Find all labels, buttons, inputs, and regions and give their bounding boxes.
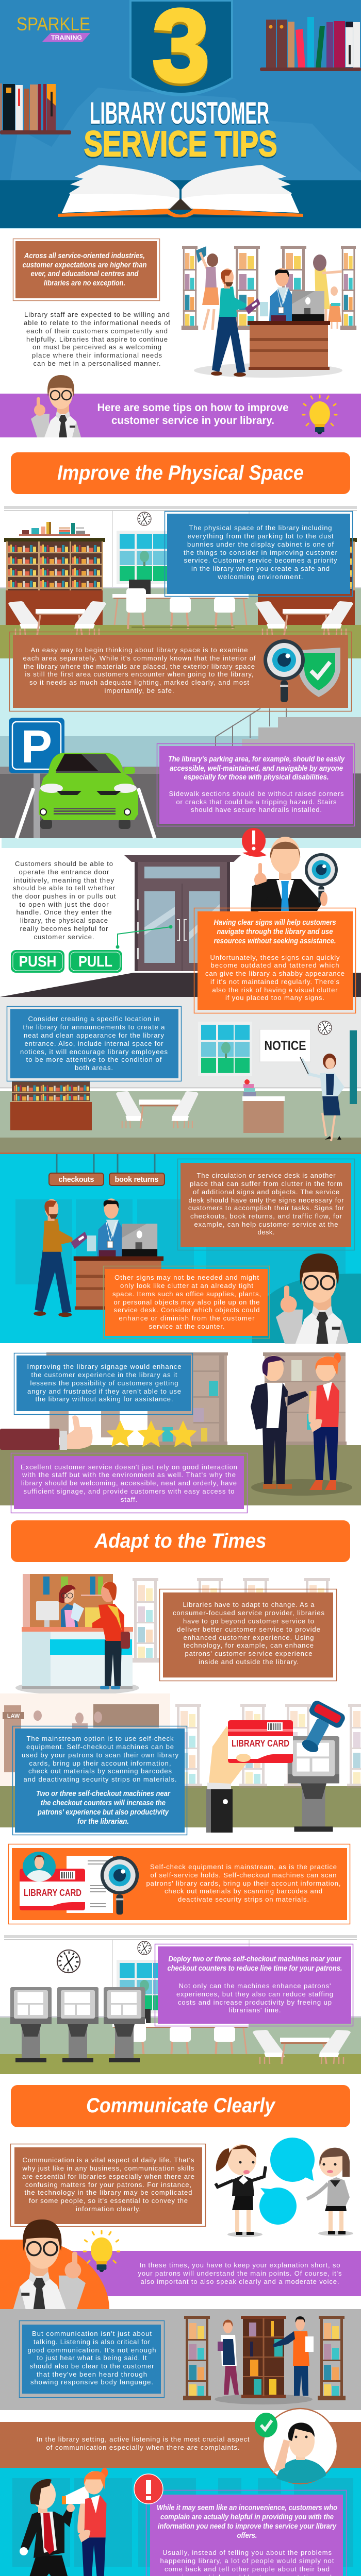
panel: excellent service: sufficient signage, and provide customers with easy access to bbox=[24, 1487, 234, 1495]
panel: self-check equipment: equipment. Self-checkout machines can be bbox=[26, 1743, 174, 1751]
panel: orange sign advice: if you placed too many signs. bbox=[225, 994, 324, 1002]
panel: orange sign advice: Having clear signs will help customers bbox=[214, 918, 336, 927]
band: keep it short: In these times, you have to keep your explanation short, so bbox=[139, 2261, 340, 2269]
band: active listening: In the library setting, active listening is the most crucial aspect bbox=[36, 2435, 250, 2443]
hanging signs: book returns bbox=[114, 1176, 159, 1184]
panel: excellent service bbox=[11, 1453, 248, 1513]
panel: improve signage bbox=[14, 1353, 193, 1415]
band: active listening: of communication especially when there are complaints. bbox=[46, 2444, 239, 2451]
panel: assess space: importantly, be safe. bbox=[104, 687, 174, 694]
floor wedge at door bbox=[0, 973, 361, 997]
exterior background bbox=[0, 658, 361, 848]
panel: deploy machines: costs and increase productivity by freeing up bbox=[178, 1998, 332, 2006]
heading: Communicate Clearly: Communicate Clearly bbox=[86, 2094, 276, 2117]
thumbs up hand bbox=[0, 1415, 93, 1450]
woman and child on the right bbox=[313, 255, 342, 330]
illustration: check-in counter bbox=[15, 1574, 139, 1695]
panel: announcements: Consider creating a specific location in bbox=[28, 1015, 160, 1023]
icon: library card and documents bbox=[20, 1852, 139, 1914]
icon: parking sign bbox=[9, 718, 64, 838]
text block: library staff bbox=[24, 311, 170, 367]
panel: self-check equipment: used by your patrons to scan their own library bbox=[22, 1751, 178, 1759]
right woman bbox=[307, 2148, 353, 2236]
panel: adapt to change: have to go beyond customer service to bbox=[183, 1617, 314, 1625]
staff woman bbox=[218, 2319, 239, 2395]
panel: self-service holds: Self-check equipment is mainstream, as is the practice bbox=[150, 1863, 337, 1871]
text block: entrance door: customer service. bbox=[34, 933, 94, 941]
panel: improve signage: the customer experience in the library as it bbox=[31, 1371, 177, 1379]
panel: physical space: everything from the parking lot to the dust bbox=[188, 532, 334, 540]
panel: other signs: service at the counter. bbox=[149, 1323, 225, 1330]
panel: self-check equipment: patrons' experience but also productivity bbox=[37, 1808, 169, 1817]
panel: physical space: the things to consider in improving customer bbox=[184, 549, 338, 556]
notice board: NOTICE bbox=[264, 1039, 306, 1053]
panel: other signs: space. Items such as office supplies, plants, bbox=[112, 1290, 261, 1298]
panel: improve signage: Improving the library signage would enhance bbox=[27, 1363, 182, 1370]
panel: self-check equipment: cards, bring up their account information, bbox=[29, 1759, 171, 1767]
panel: assess space: the library where the materials are placed, the exterior library space bbox=[24, 663, 255, 670]
panel: announcements bbox=[7, 1007, 182, 1081]
hand holding card bbox=[206, 1720, 293, 1833]
illustration: entrance door bbox=[124, 855, 241, 971]
panel: other signs: only look like clutter at an already tight bbox=[120, 1282, 253, 1290]
panel: parking and sidewalks: especially for those with physical disabilities. bbox=[184, 773, 329, 782]
panel: service desk clutter: example, can help customer service at the bbox=[194, 1221, 338, 1228]
icon: library card and documents: LIBRARY CARD bbox=[24, 1887, 81, 1898]
panel: adapt to change: technology, for example, can enhance bbox=[184, 1641, 314, 1649]
panel: physical space: bunnies under the display cabinet is one of bbox=[187, 540, 334, 548]
cyan background for complaints bbox=[0, 2468, 361, 2576]
panel: intro callout: Across all service-oriented industries, bbox=[24, 251, 145, 260]
scene: listening staff bbox=[0, 2309, 361, 2410]
connector line from door handle to signs bbox=[116, 925, 172, 949]
text block: library staff: each of their customers competently and bbox=[26, 327, 168, 335]
panel: excellent service: library should be welcoming, accessible, neat and orderly, have bbox=[21, 1479, 237, 1487]
panel: assess space: An easy way to begin thinking about library space is to examine bbox=[31, 646, 248, 654]
text block: entrance door: really becomes helpful for bbox=[20, 925, 108, 933]
panel: adapt to change: inside and outside the library. bbox=[199, 1658, 299, 1666]
panel: intro callout: customer expectations are higher than bbox=[23, 261, 146, 269]
panel: self-check equipment: for the librarian. bbox=[77, 1817, 129, 1826]
law shelf sign: LAW bbox=[7, 1713, 20, 1719]
panel: service desk clutter: checkouts, book returns, and traffic flow, for bbox=[190, 1212, 342, 1220]
panel: physical space: The physical space of the library including bbox=[189, 524, 332, 532]
panel: self-check equipment: The mainstream option is to use self-check bbox=[27, 1735, 174, 1742]
panel: physical space: service. Customer service becomes a priority bbox=[184, 556, 337, 564]
illustration: man with megaphone and woman bbox=[10, 2468, 141, 2576]
panel: announcements: to be more attentive to the condition of bbox=[26, 1056, 162, 1063]
left woman bbox=[216, 2144, 266, 2237]
panel: adapt to change: patrons' customer service experience bbox=[185, 1650, 313, 1657]
scene: signage and staff bbox=[0, 1352, 361, 1505]
panel: complaints: information you need to improve the service your library bbox=[158, 2522, 337, 2531]
woman reaching for a book bbox=[196, 246, 219, 330]
man and librarian at counter bbox=[211, 268, 330, 377]
title: SERVICE TIPS bbox=[84, 124, 277, 164]
panel: deploy machines: Not only can the machines enhance patrons' bbox=[178, 1982, 331, 1990]
hanging signs bbox=[49, 1154, 165, 1185]
woman bbox=[77, 2468, 108, 2576]
heading: Improve the Physical Space bbox=[11, 452, 350, 494]
hand holding card: LIBRARY CARD bbox=[232, 1738, 289, 1749]
panel: orange sign advice: resources without seeking assistance. bbox=[214, 937, 336, 945]
panel: listening: good communication. It's not enough bbox=[28, 2346, 156, 2354]
text block: library staff: able to relate to the informational needs of bbox=[24, 319, 170, 327]
panel: other signs bbox=[103, 1266, 269, 1338]
text block: library staff: Library staff are expected to be willing and bbox=[24, 311, 170, 318]
text block: library staff: place where their informational needs bbox=[32, 351, 162, 359]
staff man bbox=[273, 2316, 314, 2396]
panel: physical space: in the library when you create a safe and bbox=[191, 565, 330, 572]
panel: physical space bbox=[165, 511, 353, 597]
panel: assess space: so it needs as much adequate lighting, marked clearly, and most bbox=[29, 679, 249, 686]
panel: adapt to change: Libraries have to adapt to change. As a bbox=[183, 1601, 315, 1608]
panel: assess space: is still the first area customers encounter when going to the library, bbox=[25, 670, 253, 678]
megaphone bbox=[62, 2485, 90, 2512]
panel: listening: to just hear what is being said. It bbox=[37, 2354, 147, 2362]
panel: complaints: happening library, a lot of people would simply not bbox=[160, 2557, 334, 2565]
panel: self-service holds: deactivate security strips on materials. bbox=[178, 1895, 309, 1903]
panel: deploy machines: librarians' time. bbox=[229, 2006, 281, 2014]
logo: Sparkle Training: SPARKLE bbox=[17, 13, 90, 35]
panel: deploy machines bbox=[155, 1944, 353, 2026]
text block: entrance door: Customers should be able to bbox=[15, 860, 113, 868]
panel: self-check equipment: and deactivating security strips on materials. bbox=[24, 1775, 176, 1783]
panel: self-check equipment bbox=[12, 1726, 187, 1835]
bookshelf: right bbox=[260, 17, 361, 71]
tan bookshelves bbox=[46, 1352, 347, 1445]
text block: library staff: can be met in a personalised manner. bbox=[33, 360, 161, 367]
band: tips intro: Here are some tips on how to improve bbox=[97, 402, 289, 414]
panel: other signs: or personal objects may also pile up on the bbox=[113, 1298, 260, 1306]
panel: excellent service: Excellent customer service doesn't just rely on good interaction bbox=[21, 1463, 237, 1471]
panel: announcements: entrance. Also, include internal space for bbox=[25, 1040, 163, 1047]
panel: deploy machines: experiences, but they also can reduce staffing bbox=[176, 1990, 333, 1998]
panel: parking and sidewalks bbox=[157, 744, 355, 826]
panel: adapt to change bbox=[160, 1589, 336, 1681]
panel: physical space: welcoming environment. bbox=[218, 573, 303, 581]
panel: listening bbox=[20, 2320, 164, 2398]
panel: orange sign advice: can give the library a shabby appearance bbox=[205, 970, 344, 977]
panel: announcements: the library for announcements to create a bbox=[23, 1023, 165, 1031]
man and librarian at counter bbox=[34, 1198, 163, 1317]
panel: service desk clutter: The circulation or service desk is another bbox=[197, 1172, 336, 1179]
panel: listening: talking. Listening is also critical for bbox=[34, 2338, 151, 2346]
panel: announcements: both areas. bbox=[75, 1064, 113, 1072]
panel: communication: for some people, so it's essential to convey the bbox=[29, 2197, 188, 2205]
panel: adapt to change: enhanced customer experience. Using bbox=[184, 1634, 314, 1641]
panel: complaints: complain are actually helpful in providing you with the bbox=[160, 2513, 334, 2521]
panel: complaints: come back and tell other people about their bad bbox=[165, 2565, 330, 2573]
panel: parking and sidewalks: or cracks that could be a tripping hazard. Stairs bbox=[176, 798, 337, 806]
heading: Improve the Physical Space: Improve the Physical Space bbox=[57, 462, 304, 484]
panel: other signs: service desk. Consider which objects could bbox=[113, 1306, 260, 1314]
text block: entrance door: operate the entrance door bbox=[19, 868, 109, 876]
panel: service desk clutter bbox=[177, 1159, 355, 1250]
panel: orange sign advice: if it's not maintained regularly. There's bbox=[210, 978, 339, 986]
hero panel bbox=[0, 0, 361, 229]
text block: entrance door: intuitively, meaning that they bbox=[14, 876, 114, 884]
panel: service desk clutter: desk should have only the signs necessary for bbox=[189, 1196, 344, 1204]
panel: service desk clutter: desk. bbox=[258, 1228, 274, 1236]
panel: complaints bbox=[146, 2490, 347, 2576]
panel: intro callout bbox=[13, 239, 160, 301]
band: keep it short bbox=[0, 2219, 361, 2310]
panel: communication: why just like in any business, communication skills bbox=[22, 2164, 194, 2172]
panel: listening: that they've been heard through bbox=[37, 2370, 147, 2378]
push and pull signs: PUSH bbox=[19, 954, 57, 970]
panel: service desk clutter: of additional signs and objects. The service bbox=[193, 1188, 339, 1196]
icon: parking sign: P bbox=[21, 721, 52, 773]
panel: self-check equipment: check out materials by scanning barcodes bbox=[28, 1767, 172, 1775]
scanner bbox=[292, 1699, 347, 1759]
logo: Sparkle Training: TRAINING bbox=[51, 34, 82, 41]
panel: assess space: each area separately. While it's commonly known that the interior of bbox=[23, 654, 256, 662]
illustration: stairs and railing bbox=[216, 708, 361, 773]
panel: assess space bbox=[9, 632, 352, 711]
panel: announcements: neat and clean appearance for the library bbox=[24, 1031, 164, 1039]
hanging signs: checkouts bbox=[59, 1176, 94, 1184]
bookcase and cabinet bbox=[10, 1081, 92, 1130]
panel: complaints: offers. bbox=[237, 2531, 257, 2540]
text block: entrance door bbox=[12, 860, 116, 941]
text block: library staff: on must be perceived as a welcoming bbox=[32, 343, 161, 351]
text block: entrance door: to open with just the door bbox=[20, 901, 109, 908]
panel: complaints: Usually, instead of telling you about the problems bbox=[162, 2549, 332, 2556]
illustration: library service desk bbox=[182, 246, 356, 378]
three stars bbox=[106, 1420, 197, 1447]
man with megaphone bbox=[20, 2479, 90, 2576]
law shelf sign bbox=[3, 1705, 24, 1772]
speech bubbles bbox=[259, 2138, 315, 2225]
shield with number 3 bbox=[129, 0, 233, 106]
panel: listening: showing responsive body language. bbox=[30, 2378, 153, 2386]
illustration: library card scanner bbox=[206, 1699, 347, 1833]
scene: notice room bbox=[0, 997, 361, 1154]
panel: listening: But communication isn't just about bbox=[32, 2330, 152, 2337]
panel: complaints: While it may seem like an inconvenience, customers who bbox=[157, 2503, 337, 2512]
panel: listening: should also be clear to the customer bbox=[30, 2362, 154, 2370]
bookshelf: left bbox=[0, 83, 71, 134]
push and pull signs bbox=[11, 950, 122, 973]
text block: library staff: helpfully. Libraries that aspire to continue bbox=[26, 335, 168, 343]
icon: listening avatar bbox=[263, 2409, 337, 2484]
panel: other signs: enhance or diminish from the customer bbox=[119, 1314, 255, 1322]
band: keep it short: your patrons will understand the main points. Of course, it's bbox=[138, 2269, 342, 2277]
icon: shield and magnifier bbox=[264, 639, 340, 702]
scene: self-check background bbox=[0, 1693, 361, 1827]
panel: communication: are essential for libraries especially when there are bbox=[22, 2173, 194, 2180]
teacher bbox=[300, 1054, 344, 1141]
panel: excellent service: staff. bbox=[121, 1496, 137, 1503]
panel: communication bbox=[10, 2144, 205, 2227]
panel: service desk clutter: place that can suffer from clutter in the form bbox=[190, 1180, 342, 1188]
icon: green check bbox=[255, 2413, 277, 2437]
panel: communication: the technology in the library may be complicated bbox=[25, 2189, 192, 2196]
heading: Adapt to the Times bbox=[11, 1520, 350, 1562]
text block: entrance door: handle. Once they enter the bbox=[17, 908, 111, 916]
heading: Communicate Clearly bbox=[11, 2085, 350, 2127]
panel: self-service holds: of self-service holds. Self-checkout machines can scan bbox=[151, 1871, 336, 1879]
title: SERVICE TIPS bbox=[84, 125, 277, 165]
panel: parking and sidewalks: should have secure handrails installed. bbox=[191, 806, 322, 814]
panel: adapt to change: consumer-focused service provider, libraries bbox=[173, 1609, 325, 1617]
notice board bbox=[260, 1029, 310, 1062]
clock bbox=[57, 1950, 80, 1973]
logo: Sparkle Training bbox=[17, 13, 90, 42]
faded shelves bbox=[12, 2478, 353, 2567]
panel: self-check equipment: the checkout counters will increase the bbox=[41, 1799, 166, 1807]
illustration: parked car bbox=[17, 753, 155, 838]
panel: self-check equipment: Two or three self-checkout machines near bbox=[36, 1789, 171, 1798]
panel: improve signage: angry and frustrated if they aren't able to use bbox=[27, 1387, 181, 1395]
scene: library interior bbox=[0, 506, 361, 658]
panel: excellent service: with the staff but with the environment as well. That's why the bbox=[22, 1471, 236, 1479]
panel: other signs: Other signs may not be needed and might bbox=[114, 1274, 259, 1281]
icon: man with glasses bbox=[31, 375, 81, 437]
panel: parking and sidewalks: Sidewalk sections should be without raised corners bbox=[169, 790, 344, 798]
panel: self-service holds bbox=[8, 1844, 350, 1924]
panel: adapt to change: deliver better customer service to provide bbox=[177, 1625, 320, 1633]
panel: announcements: notices, it will encourage library employees bbox=[20, 1048, 168, 1056]
illustration: businessman with magnifier and alert bbox=[242, 828, 338, 912]
man and woman talking bbox=[251, 1353, 352, 1496]
panel: improve signage: the library without asking for assistance. bbox=[35, 1395, 173, 1403]
title bbox=[84, 96, 277, 165]
illustration: two women talking bbox=[216, 2138, 353, 2237]
teacher's desk with books and apple bbox=[242, 1079, 285, 1133]
text block: entrance door: should be able to tell whether bbox=[13, 884, 116, 892]
icon: alert circle bbox=[134, 2474, 163, 2504]
panel: service desk clutter: customers to accomplish their tasks. Signs for bbox=[188, 1204, 344, 1212]
panel: orange sign advice: also the risk of having a visual clutter bbox=[212, 986, 338, 994]
panel: intro callout: ever, and educational centres and bbox=[31, 269, 139, 278]
text block: entrance door: library, the physical space bbox=[20, 917, 108, 924]
panel: intro callout: libraries are no exception. bbox=[44, 279, 125, 287]
panel: orange sign advice bbox=[194, 908, 356, 1013]
heading: Adapt to the Times: Adapt to the Times bbox=[94, 1530, 267, 1552]
panel: orange sign advice: become outdated and tattered which bbox=[210, 961, 339, 969]
three kiosks bbox=[10, 1987, 145, 2062]
open book bbox=[58, 165, 303, 218]
band: keep it short: also important to also speak clearly and a moderate voice. bbox=[140, 2278, 339, 2285]
scene: self-checkout kiosks bbox=[0, 1935, 361, 2088]
faded shelves behind adapt panel bbox=[132, 1578, 331, 1663]
panel: communication: information clearly. bbox=[76, 2205, 141, 2213]
panel: improve signage: lessens the possibility of customers getting bbox=[30, 1379, 178, 1387]
panel: self-service holds: check out materials by scanning barcodes and bbox=[165, 1887, 322, 1895]
man with glasses bbox=[276, 1253, 349, 1344]
panel: orange sign advice: Unfortunately, these signs can quickly bbox=[210, 954, 340, 961]
band: tips intro bbox=[0, 375, 361, 437]
center bookcase bbox=[241, 2316, 286, 2398]
panel: self-service holds: patrons' library cards, bring up their account information, bbox=[146, 1879, 340, 1887]
panel: communication: Communication is a vital aspect of daily life. That's bbox=[23, 2156, 194, 2164]
band: tips intro: customer service in your library. bbox=[111, 415, 274, 427]
scene: circulation desk bbox=[0, 1154, 361, 1344]
band: active listening bbox=[0, 2409, 361, 2484]
panel: orange sign advice: navigate through the library and use bbox=[217, 927, 333, 936]
icon: light bulb bbox=[303, 395, 337, 434]
text block: entrance door: the door pushes in or pulls out bbox=[12, 892, 116, 900]
push and pull signs: PULL bbox=[78, 954, 112, 970]
panel: communication: confusing matters for your patrons. For instance, bbox=[25, 2181, 191, 2189]
